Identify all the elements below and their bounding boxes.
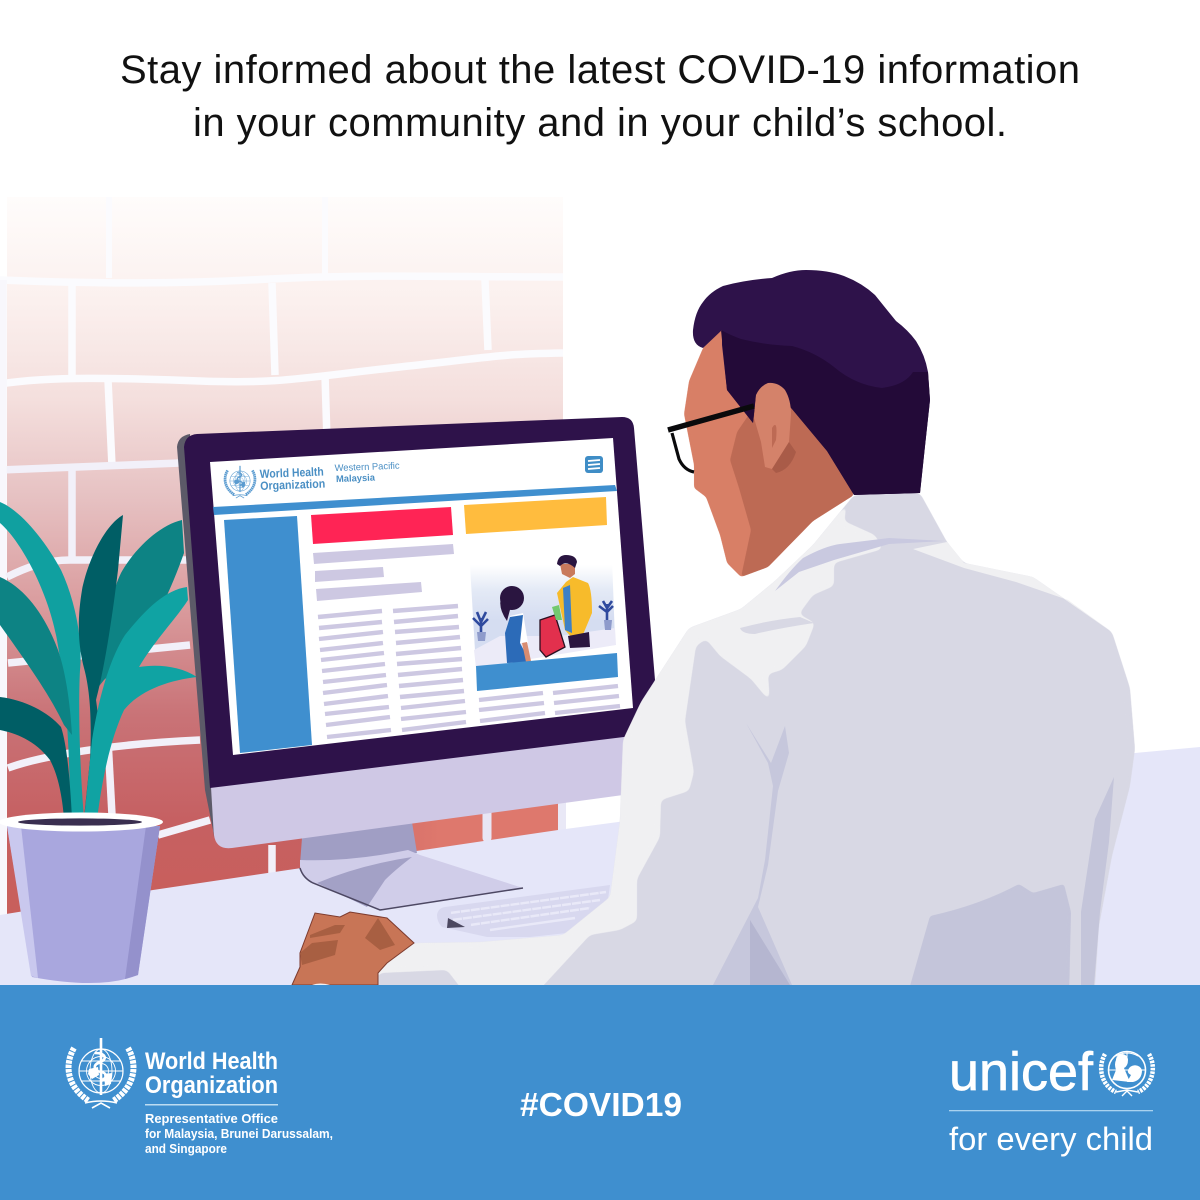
title: in your community and in your child’s school. xyxy=(193,101,1007,145)
monitor bezel xyxy=(184,417,655,788)
WHO name: World Health xyxy=(145,1048,278,1075)
keyboard xyxy=(437,885,610,937)
neck shadow xyxy=(730,405,854,577)
site header text xyxy=(259,461,401,493)
WHO emblem xyxy=(69,1038,133,1108)
back centre fold xyxy=(713,723,792,985)
desk xyxy=(0,747,1200,990)
WHO office text: for Malaysia, Brunei Darussalam, xyxy=(145,1126,333,1141)
footer band xyxy=(0,985,1200,1200)
site header text: Malaysia xyxy=(336,473,376,485)
girl xyxy=(500,586,531,663)
flower pot xyxy=(0,812,163,983)
UNICEF logo: for every child xyxy=(949,1120,1153,1157)
site header text: Western Pacific xyxy=(334,461,400,474)
shirt back xyxy=(378,493,1135,1000)
backpack xyxy=(540,605,565,657)
UNICEF logo xyxy=(949,1042,1153,1157)
WHO name xyxy=(145,1048,278,1099)
monitor chin xyxy=(206,720,660,848)
site logo emblem xyxy=(225,466,255,498)
UNICEF emblem xyxy=(1101,1051,1153,1096)
leaf: upper left xyxy=(0,502,84,818)
WHO name: Organization xyxy=(145,1072,278,1099)
right side fold xyxy=(1081,777,1114,985)
leaf: right lower xyxy=(84,587,197,820)
WHO office text: and Singapore xyxy=(145,1141,227,1156)
ear xyxy=(754,383,796,473)
shirt highlights xyxy=(360,495,883,1000)
yellow banner xyxy=(464,497,607,534)
neck and face xyxy=(684,328,854,577)
lower back shadow xyxy=(906,884,1071,1000)
article text lines xyxy=(318,606,620,737)
site header text: World Health xyxy=(260,465,324,481)
man in yellow jacket xyxy=(557,555,592,648)
heading bars xyxy=(313,544,454,601)
monitor stand xyxy=(300,822,523,910)
man xyxy=(360,270,1135,1000)
monitor xyxy=(177,417,660,848)
title: Stay informed about the latest COVID-19 information xyxy=(120,48,1080,92)
WHO office text xyxy=(145,1111,333,1156)
glasses xyxy=(668,406,754,472)
menu button xyxy=(585,456,603,473)
collar shadow xyxy=(775,538,945,591)
leaf: centre upright xyxy=(79,515,123,818)
brick wall xyxy=(0,197,563,915)
plant xyxy=(0,502,197,820)
leaf: lower left xyxy=(0,697,72,818)
small plant right xyxy=(599,601,613,630)
collar fold highlight xyxy=(740,617,814,634)
hashtag: #COVID19 xyxy=(520,1086,682,1123)
site header text: Organization xyxy=(260,477,325,493)
side column xyxy=(224,516,312,753)
monitor screen xyxy=(210,438,633,755)
blue caption box xyxy=(476,653,618,691)
monitor side edge xyxy=(177,434,214,838)
screen illustration xyxy=(470,555,616,668)
small plant left xyxy=(473,612,488,641)
leaf: right upper xyxy=(96,520,184,690)
hair xyxy=(693,270,930,495)
shoulder highlight xyxy=(913,542,1112,632)
red banner xyxy=(311,507,453,544)
WHO office text: Representative Office xyxy=(145,1111,278,1126)
WHO logo xyxy=(69,1038,333,1156)
title xyxy=(120,48,1080,145)
leaf: middle left xyxy=(0,577,72,735)
UNICEF logo: unicef xyxy=(949,1042,1094,1102)
header rule xyxy=(213,485,617,515)
hand xyxy=(292,912,414,985)
